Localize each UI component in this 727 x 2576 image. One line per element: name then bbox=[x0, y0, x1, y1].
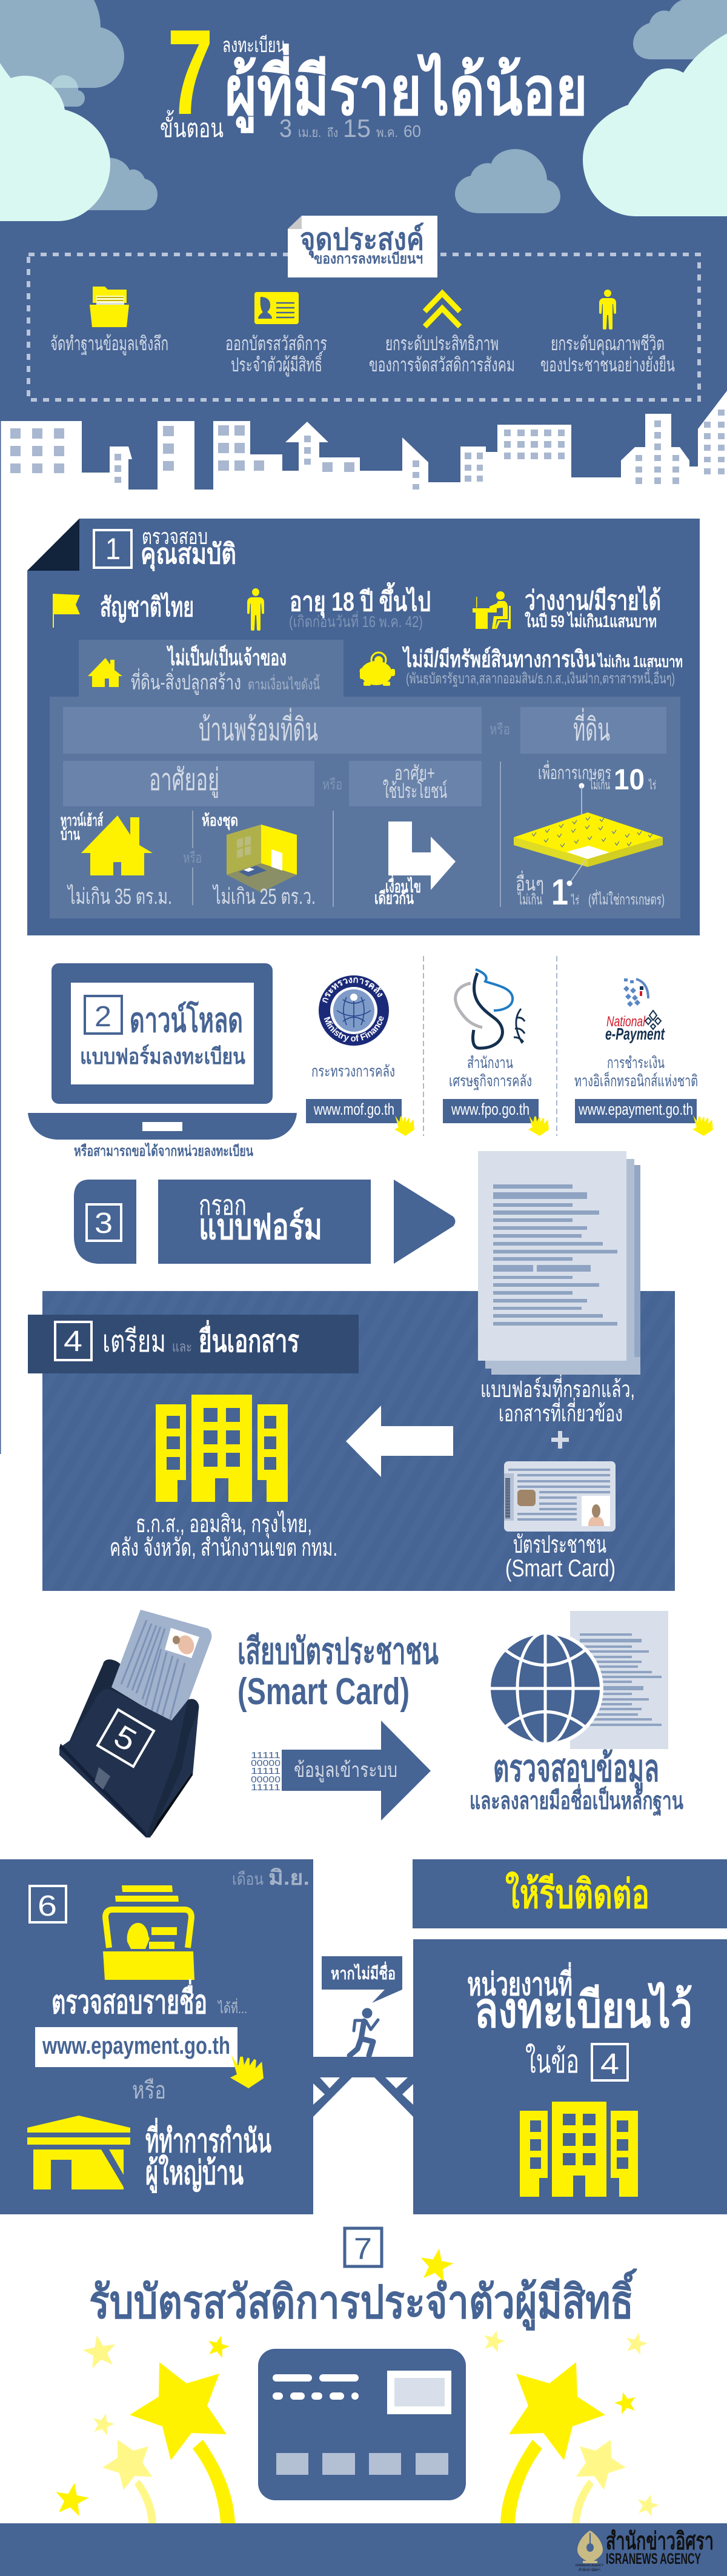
condo label: ห้องชุด bbox=[202, 811, 238, 831]
icon: folder bbox=[90, 287, 129, 327]
step 4 reference box: 4 bbox=[600, 2048, 619, 2080]
icon: laptop bbox=[28, 963, 297, 1140]
step 4 heading bar bbox=[28, 1315, 359, 1373]
same condition label bbox=[374, 874, 421, 908]
agricultural land label: ไม่เกิน bbox=[589, 777, 610, 792]
logo: National e-Payment bbox=[605, 978, 665, 1043]
check names text: ตรวจสอบรายชื่อ bbox=[51, 1979, 207, 2020]
financial assets: ไม่มี/มีทรัพย์สินทางการเงิน bbox=[402, 646, 596, 672]
id card caption: บัตรประชาชน bbox=[513, 1532, 606, 1558]
label: e-Payment: การชำระเงิน bbox=[607, 1054, 665, 1072]
step 1 heading: คุณสมบัติ bbox=[141, 538, 236, 571]
step 3 tab: 3 bbox=[95, 1207, 113, 1240]
step 7 number box bbox=[345, 2228, 382, 2266]
clouds bbox=[0, 0, 727, 221]
footer band bbox=[0, 2523, 727, 2576]
speech bubble: if no name bbox=[322, 1956, 402, 2003]
icon: id card bbox=[254, 292, 299, 324]
step 3 banner bbox=[74, 1180, 456, 1264]
step 6 number box: 6 bbox=[38, 1890, 57, 1922]
subdistrict office text: ที่ทำการกำนัน bbox=[145, 2117, 271, 2159]
panel: contact heading: ให้รีบติดต่อ bbox=[505, 1870, 649, 1916]
same condition label: เงื่อนไข bbox=[385, 874, 421, 896]
arrow left bbox=[346, 1406, 453, 1477]
box: residence and use: ใช้ประโยชน์ bbox=[383, 779, 447, 803]
note heading: จุดประสงค์ bbox=[300, 222, 424, 258]
box: house with land: บ้านพร้อมที่ดิน bbox=[199, 708, 318, 748]
purpose text 4 bbox=[540, 333, 675, 376]
small pale stars bbox=[81, 2328, 661, 2518]
link: epayment bbox=[575, 1099, 697, 1123]
step 5 number bbox=[98, 1710, 154, 1767]
pale tails bbox=[134, 2480, 594, 2523]
heading: insert smart card: (Smart Card) bbox=[237, 1671, 410, 1713]
agricultural land label bbox=[538, 760, 656, 796]
registration dates: เม.ย. bbox=[298, 125, 321, 140]
other land label: 1 bbox=[551, 872, 568, 912]
month label bbox=[232, 1867, 310, 1890]
icon: flag bbox=[53, 594, 80, 628]
heading: verify data bbox=[470, 1748, 683, 1817]
purpose text 2: ออกบัตรสวัสดิการ bbox=[225, 333, 327, 354]
step 4 reference box bbox=[592, 2044, 628, 2080]
step 1 number box: 1 bbox=[105, 532, 121, 566]
icon: name check kiosk bbox=[103, 1885, 194, 1980]
step 1 number box bbox=[94, 530, 131, 568]
townhouse label: บ้าน bbox=[61, 825, 80, 843]
bridge with runner bbox=[313, 1956, 413, 2120]
step 4 heading bar: และ bbox=[172, 1339, 192, 1355]
lighter property panel bbox=[50, 640, 680, 918]
panel: step 6 check names bbox=[0, 1859, 313, 2214]
step 4 heading bar: 4 bbox=[64, 1326, 82, 1358]
title main: ผู้ที่มีรายได้น้อย: ผู้ที่มีรายได้น้อย bbox=[225, 43, 588, 133]
or label: หรือ bbox=[490, 722, 510, 738]
panel: contact heading bbox=[413, 1859, 727, 1928]
panel: purposes bbox=[28, 216, 699, 400]
step 4 heading bar: ยื่นเอกสาร bbox=[199, 1320, 299, 1358]
icon: id card bbox=[504, 1461, 616, 1532]
townhouse label bbox=[61, 811, 103, 843]
submit locations: ธ.ก.ส., ออมสิน, กรุงไทย, bbox=[136, 1510, 312, 1539]
logo: Ministry of Finance seal: กระทรวงการคลัง bbox=[322, 977, 383, 1003]
condo limit: ไม่เกิน 25 ตร.ว. bbox=[212, 884, 316, 909]
step 3 heading bbox=[158, 1180, 371, 1264]
binary data: 11111 bbox=[251, 1782, 281, 1793]
townhouse label: ทาวน์เฮ้าส์ bbox=[61, 811, 103, 829]
purpose text 3 bbox=[369, 333, 515, 376]
icon: person age bbox=[247, 588, 264, 631]
link: mof: www.mof.go.th bbox=[313, 1100, 394, 1118]
purpose text 1: จัดทำฐานข้อมูลเชิงลึก bbox=[50, 333, 168, 356]
smart card bbox=[111, 1610, 211, 1724]
icon: condo room bbox=[227, 825, 297, 892]
box: residence: อาศัยอยู่ bbox=[149, 763, 219, 798]
age requirement bbox=[289, 582, 431, 631]
title bbox=[160, 5, 588, 142]
age requirement: อายุ 18 ปี ขึ้นไป bbox=[290, 582, 431, 619]
step 2 number box bbox=[85, 996, 122, 1034]
employment income: ในปี 59 ไม่เกิน1แสนบาท bbox=[525, 611, 657, 631]
logo: Ministry of Finance seal: Ministry of Finance bbox=[324, 1017, 384, 1042]
binary data: 00000 bbox=[251, 1774, 281, 1785]
note heading bbox=[288, 216, 437, 277]
icon: smart card reader step 5 bbox=[59, 1610, 211, 1837]
registration dates: พ.ค. bbox=[376, 125, 398, 140]
speech bubble: if no name: หากไม่มีชื่อ bbox=[331, 1961, 396, 1983]
submit locations: คลัง จังหวัด, สำนักงานเขต กทม. bbox=[110, 1535, 337, 1561]
title line: ลงทะเบียน: ลงทะเบียน bbox=[222, 34, 285, 57]
step 7 number box: 7 bbox=[354, 2232, 372, 2266]
id card caption: (Smart Card) bbox=[505, 1555, 616, 1582]
link: fpo: www.fpo.go.th bbox=[451, 1100, 529, 1118]
box: land: ที่ดิน bbox=[573, 708, 610, 748]
left page edge line bbox=[0, 421, 1, 1454]
label: Fiscal Policy Office bbox=[449, 1054, 532, 1090]
header sky background bbox=[0, 0, 727, 521]
icon: document behind globe bbox=[570, 1611, 668, 1749]
icon: townhouse bbox=[81, 815, 153, 875]
month label: เดือน bbox=[232, 1870, 264, 1888]
step 3 heading: แบบฟอร์ม bbox=[199, 1207, 322, 1247]
icon: land parcel bbox=[514, 783, 663, 886]
registration dates: ถึง bbox=[327, 127, 338, 140]
documents list bbox=[480, 1373, 635, 1427]
logo: National e-Payment: e-Payment bbox=[605, 1024, 665, 1043]
other land label: ไร่ bbox=[571, 894, 579, 908]
panel: step 1 qualifications bbox=[27, 519, 700, 935]
contact text: ในข้อ bbox=[525, 2043, 579, 2080]
arrow bbox=[394, 1180, 456, 1264]
step 5 number: 5 bbox=[108, 1719, 142, 1759]
submit locations bbox=[110, 1510, 337, 1561]
dashed frame bbox=[28, 254, 699, 400]
nationality: สัญชาติไทย bbox=[100, 591, 194, 623]
logo: Isranews Agency bbox=[576, 2528, 714, 2572]
step 1 heading bbox=[141, 524, 236, 571]
binary data: 11111 bbox=[251, 1750, 281, 1761]
bridge bbox=[313, 2057, 413, 2120]
or label: หรือ bbox=[132, 2077, 166, 2104]
link box: epayment bbox=[35, 2027, 237, 2067]
panel: contact registered office bbox=[413, 1939, 727, 2214]
icon: office building bbox=[156, 1395, 288, 1502]
purpose text 3: ยกระดับประสิทธิภาพ bbox=[385, 333, 499, 354]
icon: small house bbox=[88, 658, 122, 687]
contact text bbox=[467, 1962, 692, 2080]
binary data: 11111 bbox=[251, 1766, 281, 1776]
link: epayment: www.epayment.go.th bbox=[578, 1100, 693, 1118]
registration dates: 3 bbox=[279, 114, 292, 142]
agricultural land label: ไร่ bbox=[648, 778, 656, 792]
step 3 heading: กรอก bbox=[199, 1189, 247, 1221]
icon: hand cursor bbox=[394, 1115, 414, 1136]
icon: stacked form document bbox=[478, 1151, 640, 1375]
logo: Fiscal Policy Office bbox=[456, 969, 525, 1048]
icon: person at desk bbox=[473, 591, 511, 629]
subdistrict office text: ผู้ใหญ่บ้าน bbox=[145, 2154, 244, 2193]
other land label bbox=[516, 871, 665, 912]
box: residence and use bbox=[349, 761, 482, 806]
house land ownership: ตามเงื่อนไขดังนี้ bbox=[248, 674, 320, 693]
icon: welfare card bbox=[258, 2349, 466, 2500]
arrow: data into system bbox=[282, 1721, 431, 1821]
step 2 heading: แบบฟอร์มลงทะเบียน bbox=[80, 1044, 245, 1069]
logo: Isranews Agency: สำนักข่าวอิศรา bbox=[579, 2568, 600, 2572]
same condition label: เดียวกัน bbox=[374, 889, 414, 908]
icon: piggy bank bbox=[360, 652, 395, 686]
laptop caption: หรือสามารถขอได้จากหน่วยลงทะเบียน bbox=[74, 1142, 253, 1160]
house land ownership bbox=[131, 644, 320, 695]
step 6 number box bbox=[30, 1886, 66, 1922]
house land ownership: ที่ดิน-สิ่งปลูกสร้าง bbox=[131, 668, 241, 695]
label: Fiscal Policy Office: เศรษฐกิจการคลัง bbox=[449, 1072, 532, 1090]
other land label: ไม่เกิน bbox=[517, 891, 542, 908]
purpose text 2 bbox=[225, 333, 327, 377]
heading: insert smart card bbox=[237, 1631, 439, 1713]
icon: hand cursor bbox=[692, 1115, 713, 1136]
label: e-Payment bbox=[574, 1054, 698, 1090]
plus bbox=[551, 1431, 569, 1449]
agricultural land label: เพื่อการเกษตร bbox=[538, 760, 611, 783]
box: residence and use: อาศัย+ bbox=[394, 762, 435, 784]
icon: hand cursor bbox=[528, 1115, 549, 1136]
small bright stars bbox=[53, 2246, 639, 2517]
pale big stars bbox=[102, 2440, 626, 2490]
reader front bbox=[59, 1689, 199, 1837]
title numeral 7: 7 bbox=[167, 5, 213, 140]
title line: ขั้นตอน: ขั้นตอน bbox=[160, 110, 224, 142]
icon: hand cursor bbox=[230, 2055, 264, 2088]
agricultural land label: 10 bbox=[614, 764, 645, 796]
or label: หรือ bbox=[183, 850, 202, 866]
age requirement: (เกิดก่อนวันที่ 16 พ.ค. 42) bbox=[289, 611, 423, 631]
step 2 heading: ดาวน์โหลด bbox=[130, 1000, 243, 1039]
logo: Isranews Agency: ISRANEWS AGENCY bbox=[576, 2564, 604, 2568]
big stars bbox=[130, 2362, 605, 2460]
step 4 heading bar: เตรียม bbox=[102, 1324, 166, 1358]
logo: National e-Payment: National bbox=[606, 1014, 645, 1030]
city skyline bbox=[0, 391, 727, 521]
label: Fiscal Policy Office: สำนักงาน bbox=[467, 1054, 513, 1072]
other land label: (ที่ไม่ใช่การเกษตร) bbox=[588, 889, 665, 908]
subdistrict office text bbox=[145, 2117, 271, 2193]
box: residence bbox=[63, 761, 314, 806]
step 1 heading: ตรวจสอบ bbox=[142, 524, 208, 549]
binary data bbox=[251, 1750, 281, 1793]
icon: globe bbox=[489, 1633, 602, 1744]
bright tails bbox=[193, 2440, 542, 2523]
icon: person bbox=[599, 290, 616, 330]
townhouse limit: ไม่เกิน 35 ตร.ม. bbox=[67, 884, 172, 909]
logo: Ministry of Finance seal bbox=[319, 975, 389, 1046]
employment income bbox=[525, 585, 661, 631]
purpose text 4: ยกระดับคุณภาพชีวิต bbox=[551, 333, 665, 356]
step 3 tab bbox=[74, 1180, 136, 1264]
month label: มิ.ย. bbox=[268, 1867, 310, 1890]
reader back bbox=[70, 1659, 199, 1837]
purpose text 3: ของการจัดสวัสดิการสังคม bbox=[369, 354, 515, 376]
step 2 number box: 2 bbox=[95, 1001, 111, 1033]
box: house with land bbox=[63, 707, 482, 754]
box: land bbox=[520, 707, 666, 754]
link box: epayment: www.epayment.go.th bbox=[42, 2033, 230, 2059]
registration dates: 60 bbox=[403, 122, 421, 141]
heading: insert smart card: เสียบบัตรประชาชน bbox=[237, 1631, 439, 1671]
link: fpo bbox=[443, 1099, 539, 1123]
house land ownership: ไม่เป็น/เป็นเจ้าของ bbox=[166, 644, 287, 670]
documents list: แบบฟอร์มที่กรอกแล้ว, bbox=[480, 1373, 635, 1403]
step 2 heading bbox=[80, 1000, 245, 1069]
icon: office building bbox=[520, 2102, 638, 2197]
label: Ministry of Finance: กระทรวงการคลัง bbox=[311, 1062, 395, 1080]
icon: district office bbox=[27, 2116, 130, 2189]
arrow: same condition bbox=[388, 822, 456, 890]
financial assets bbox=[402, 646, 683, 687]
registration dates bbox=[279, 114, 421, 142]
check names text: ได้ที่... bbox=[217, 1998, 247, 2017]
employment income: ว่างงาน/มีรายได้ bbox=[525, 585, 661, 616]
financial assets: ไม่เกิน 1แสนบาท bbox=[597, 652, 683, 671]
purpose text 2: ประจำตัวผู้มีสิทธิ์ bbox=[231, 351, 324, 377]
icon: up chevrons bbox=[425, 293, 460, 327]
note heading: ของการลงทะเบียนฯ bbox=[314, 251, 423, 267]
arrow: data into system: ข้อมูลเข้าระบบ bbox=[294, 1759, 397, 1782]
panel: step 4 documents bbox=[28, 1291, 675, 1591]
contact text: หน่วยงานที่ bbox=[467, 1962, 573, 2002]
link: mof bbox=[306, 1099, 402, 1123]
stars and fireworks bbox=[53, 2246, 661, 2523]
binary data: 00000 bbox=[251, 1758, 281, 1768]
documents list: เอกสารที่เกี่ยวข้อง bbox=[499, 1398, 623, 1427]
icon: running person bbox=[350, 2008, 378, 2056]
registration dates: 15 bbox=[343, 114, 371, 142]
or label: หรือ bbox=[322, 777, 342, 793]
other land label: อื่นๆ bbox=[516, 871, 544, 895]
id card caption bbox=[505, 1532, 616, 1582]
